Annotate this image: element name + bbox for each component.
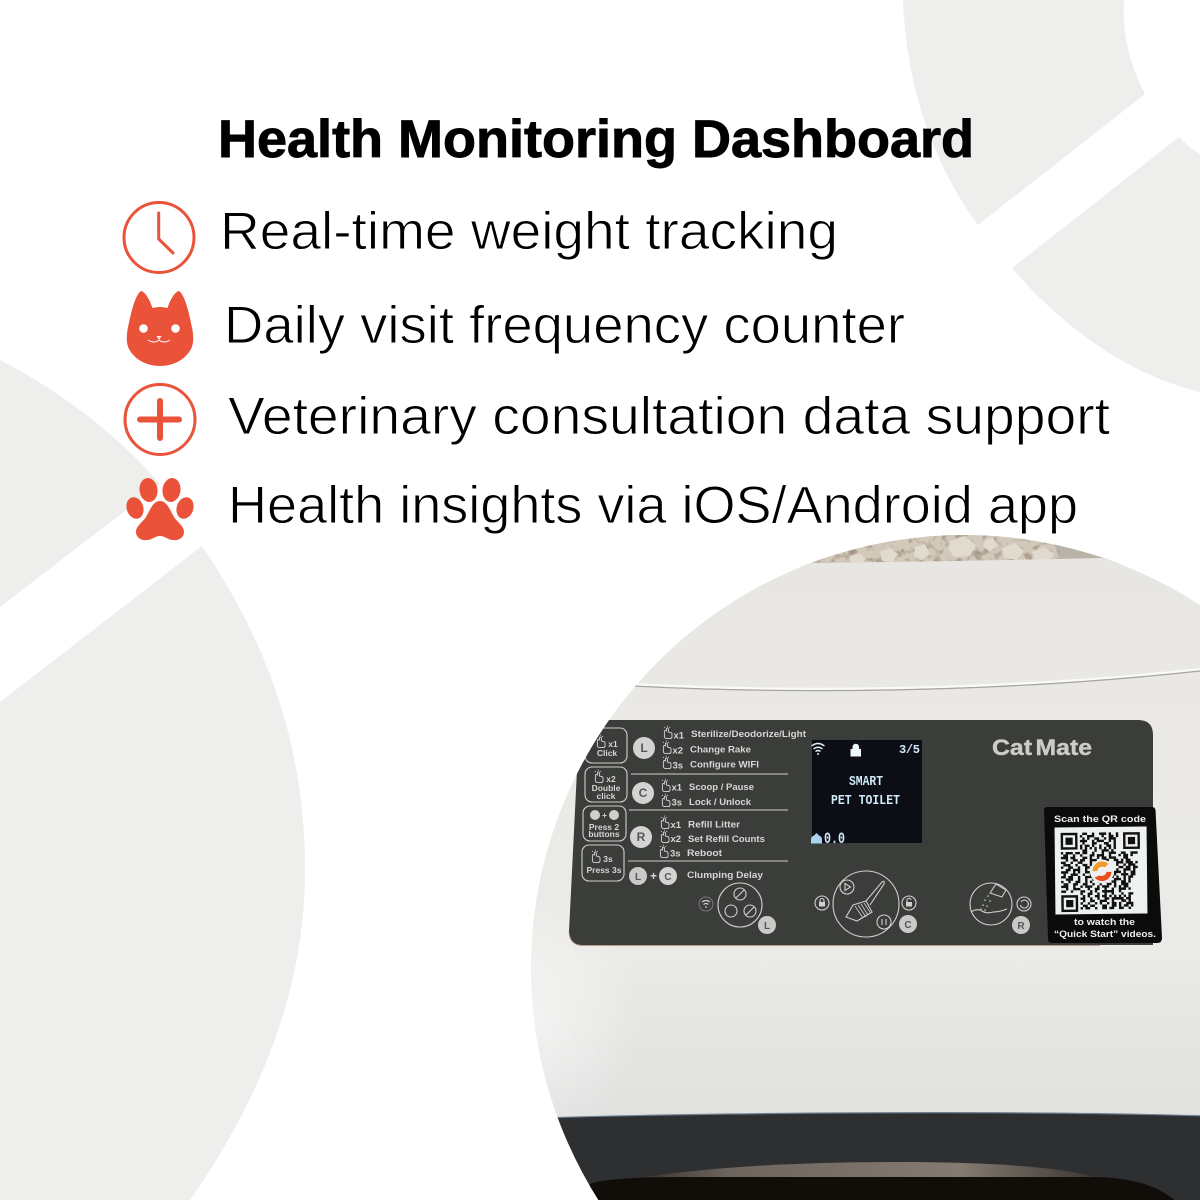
button R instructions: x2 [670, 834, 681, 845]
QR code sticker [1044, 807, 1162, 943]
mode legend boxes: Click [597, 748, 617, 758]
icon: paw [124, 477, 196, 540]
litter granules [794, 535, 1120, 570]
background shape: left circle upper segment [0, 360, 160, 607]
button L instructions: x2 [672, 746, 683, 756]
background shape: top right arc upper segment [903, 0, 1145, 225]
button L instructions: L [640, 741, 648, 755]
L plus C clumping delay: C [664, 872, 672, 883]
mode legend boxes: 3s [603, 854, 613, 864]
L plus C clumping delay [629, 867, 764, 885]
QR code sticker: “Quick Start” videos. [1054, 929, 1156, 940]
QR code [1055, 827, 1147, 914]
R refill dial icon [970, 883, 1031, 934]
R refill dial icon: R [1017, 921, 1025, 932]
mode legend boxes: Press 3s [587, 865, 622, 875]
QR code sticker: to watch the [1074, 917, 1135, 928]
mode legend boxes: + [602, 810, 607, 820]
Cat Mate logo: Cat Mate [992, 735, 1092, 760]
icon: plus in circle [125, 384, 195, 454]
feature: veterinary support: Veterinary consultation data support [228, 387, 1110, 446]
button L instructions: x1 [674, 730, 685, 742]
mode legend boxes: x1 [608, 739, 618, 749]
mode legend boxes: click [597, 791, 616, 801]
button R instructions: R [637, 830, 646, 844]
L dial icon [699, 883, 776, 934]
oled screen: SMART [849, 774, 883, 790]
oled screen: 3/5 [899, 743, 920, 757]
button C instructions [629, 779, 788, 810]
button L instructions: Configure WIFI [690, 760, 759, 770]
lock glyph [851, 744, 860, 756]
mode legend boxes: buttons [588, 829, 620, 839]
background shape: top right arc lower segment [1012, 137, 1200, 392]
QR code sticker: Scan the QR code [1054, 814, 1146, 825]
button C instructions: 3s [672, 798, 682, 808]
button C instructions: Lock / Unlock [689, 797, 752, 808]
button C instructions: Scoop / Pause [689, 782, 754, 793]
litter box lid and body [531, 558, 1200, 1117]
button R instructions: x1 [670, 820, 682, 831]
QR centre logo [1090, 859, 1114, 884]
oled screen: PET TOILET [831, 793, 900, 809]
button R instructions: Reboot [687, 848, 723, 859]
oled screen: 0.0 [824, 830, 845, 848]
button L instructions [631, 726, 807, 774]
icon: clock [124, 202, 194, 272]
feature: visit counter: Daily visit frequency counter [224, 296, 905, 355]
icon: cat face [127, 291, 193, 366]
control panel [569, 720, 1153, 946]
background shape: left circle lower segment [0, 546, 305, 1200]
button R instructions: Set Refill Counts [688, 834, 765, 845]
button L instructions: 3s [672, 760, 683, 772]
feature: weight tracking: Real-time weight tracking [220, 202, 838, 261]
mode legend boxes: Double [592, 783, 621, 793]
L plus C clumping delay: + [650, 869, 657, 883]
mode legend boxes: x2 [606, 774, 616, 784]
button L instructions: Sterilize/Deodorize/Light [691, 729, 807, 740]
feature: app insights: Health insights via iOS/Android app [228, 476, 1078, 535]
C scoop dial icon [815, 871, 917, 937]
button R instructions: Refill Litter [688, 820, 740, 830]
button C instructions: x1 [672, 782, 683, 794]
oled screen [811, 740, 922, 848]
button C instructions: C [639, 786, 648, 800]
L dial icon: L [764, 921, 770, 932]
button L instructions: Change Rake [690, 744, 751, 756]
product photo in circular crop [531, 535, 1200, 1200]
L plus C clumping delay: L [635, 872, 641, 883]
mode legend boxes [582, 728, 627, 881]
button R instructions: 3s [670, 848, 681, 860]
L plus C clumping delay: Clumping Delay [687, 870, 764, 881]
C scoop dial icon: C [904, 920, 912, 931]
dark lower bezel [540, 1113, 1200, 1200]
title: Health Monitoring Dashboard [218, 110, 974, 169]
lid seam [630, 670, 1200, 691]
button R instructions [628, 816, 788, 861]
mode legend boxes: Press 2 [589, 822, 619, 832]
wifi glyph [812, 744, 824, 754]
